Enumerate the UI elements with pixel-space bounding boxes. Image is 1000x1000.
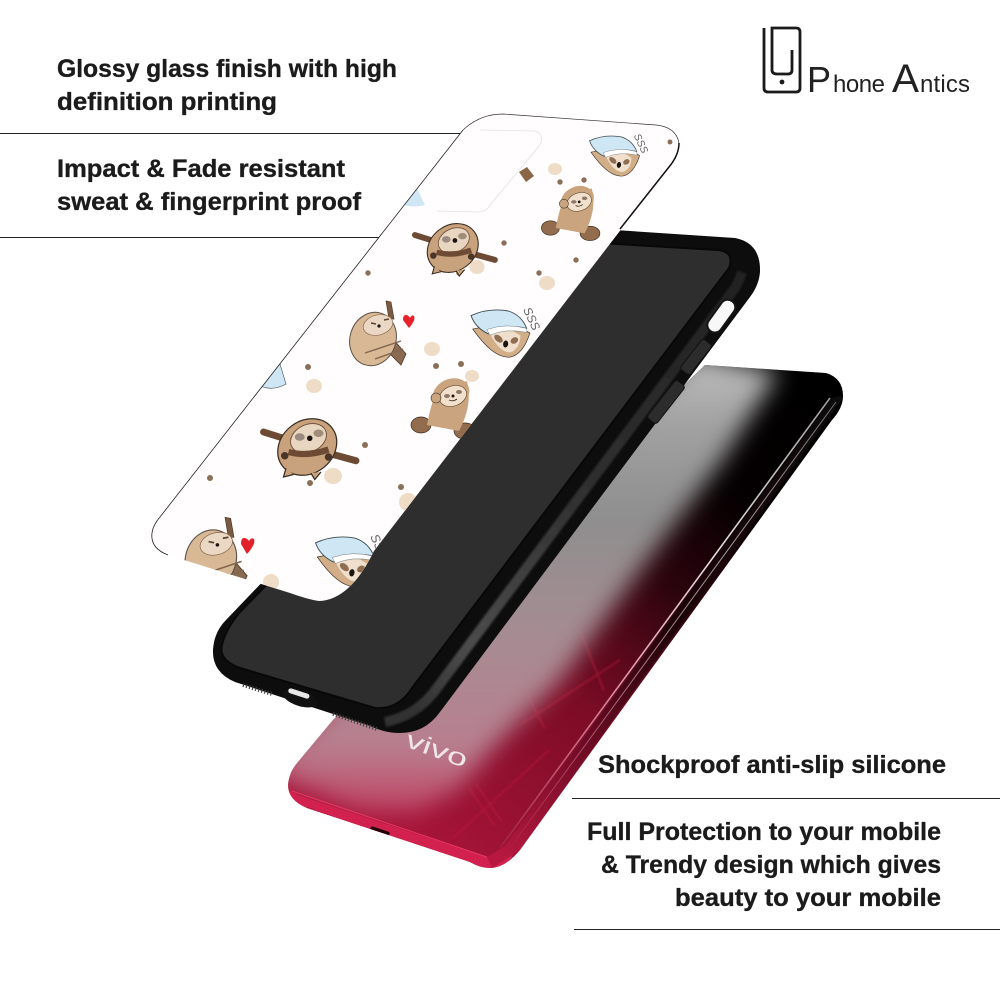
- sloth on branch, lower: [260, 418, 360, 481]
- logo: Phone Antics: ntics: [920, 71, 970, 98]
- speaker dots: [307, 807, 335, 818]
- caption: full protection: [587, 818, 941, 912]
- peach dots: [263, 163, 562, 590]
- case: charging port: [280, 685, 320, 711]
- case: volume buttons: [680, 338, 712, 376]
- caption: full protection: beauty to your mobile: [675, 884, 941, 912]
- heart, bottom: [241, 538, 254, 554]
- camera cutout outline: [437, 130, 542, 212]
- sloth with pillow, top right: [589, 134, 648, 176]
- caption: shockproof: Shockproof anti-slip silicone: [598, 751, 946, 779]
- sloth with pillow, bottom: [315, 535, 381, 586]
- caption: glossy glass finish: definition printing: [57, 88, 277, 116]
- caption: impact and fade resistant: sweat & fingerprint proof: [57, 188, 362, 216]
- case: side bevel: [385, 272, 742, 722]
- sloth on branch, upper: [412, 223, 498, 277]
- caption: glossy glass finish: [57, 55, 397, 116]
- red grid pattern: [452, 628, 620, 839]
- bottom rim: [288, 788, 513, 868]
- case: speaker grills: [243, 685, 377, 729]
- phone: red back body: [265, 352, 850, 875]
- heart, middle: [403, 315, 414, 328]
- caption: full protection: & Trendy design which gives: [601, 851, 941, 879]
- caption: full protection: Full Protection to your mobile: [587, 818, 941, 846]
- pillow and stump fragments: [404, 189, 425, 206]
- caption: impact and fade resistant: Impact & Fade resistant: [57, 155, 346, 183]
- logo: Phone Antics: [764, 28, 970, 101]
- grey haze fade: [265, 352, 778, 812]
- logo: Phone Antics: A: [892, 57, 919, 101]
- side rim: [487, 395, 845, 868]
- panel edge: [463, 114, 679, 143]
- small dots: [207, 140, 672, 490]
- sloth hugging branch with heart: [349, 300, 406, 366]
- text: vivo logo: vivo: [402, 726, 471, 774]
- caption: impact and fade resistant: [57, 155, 362, 216]
- icon: phone outline: [764, 28, 800, 92]
- case: camera side cutout: [704, 297, 738, 335]
- case: inner recess: [221, 243, 731, 708]
- logo: Phone Antics: hone: [833, 71, 885, 98]
- charging port: [370, 826, 390, 835]
- case: black silicone: [213, 229, 760, 733]
- sitting sloth, middle: [410, 378, 472, 439]
- caption: glossy glass finish: Glossy glass finish with high: [57, 55, 397, 83]
- sloth with pillow, middle: [470, 308, 540, 358]
- sloth hugging branch, bottom: [184, 516, 248, 580]
- panel: printed glass back: [152, 114, 679, 601]
- sitting sloth, top right: [541, 181, 600, 241]
- logo: Phone Antics: P: [807, 59, 831, 100]
